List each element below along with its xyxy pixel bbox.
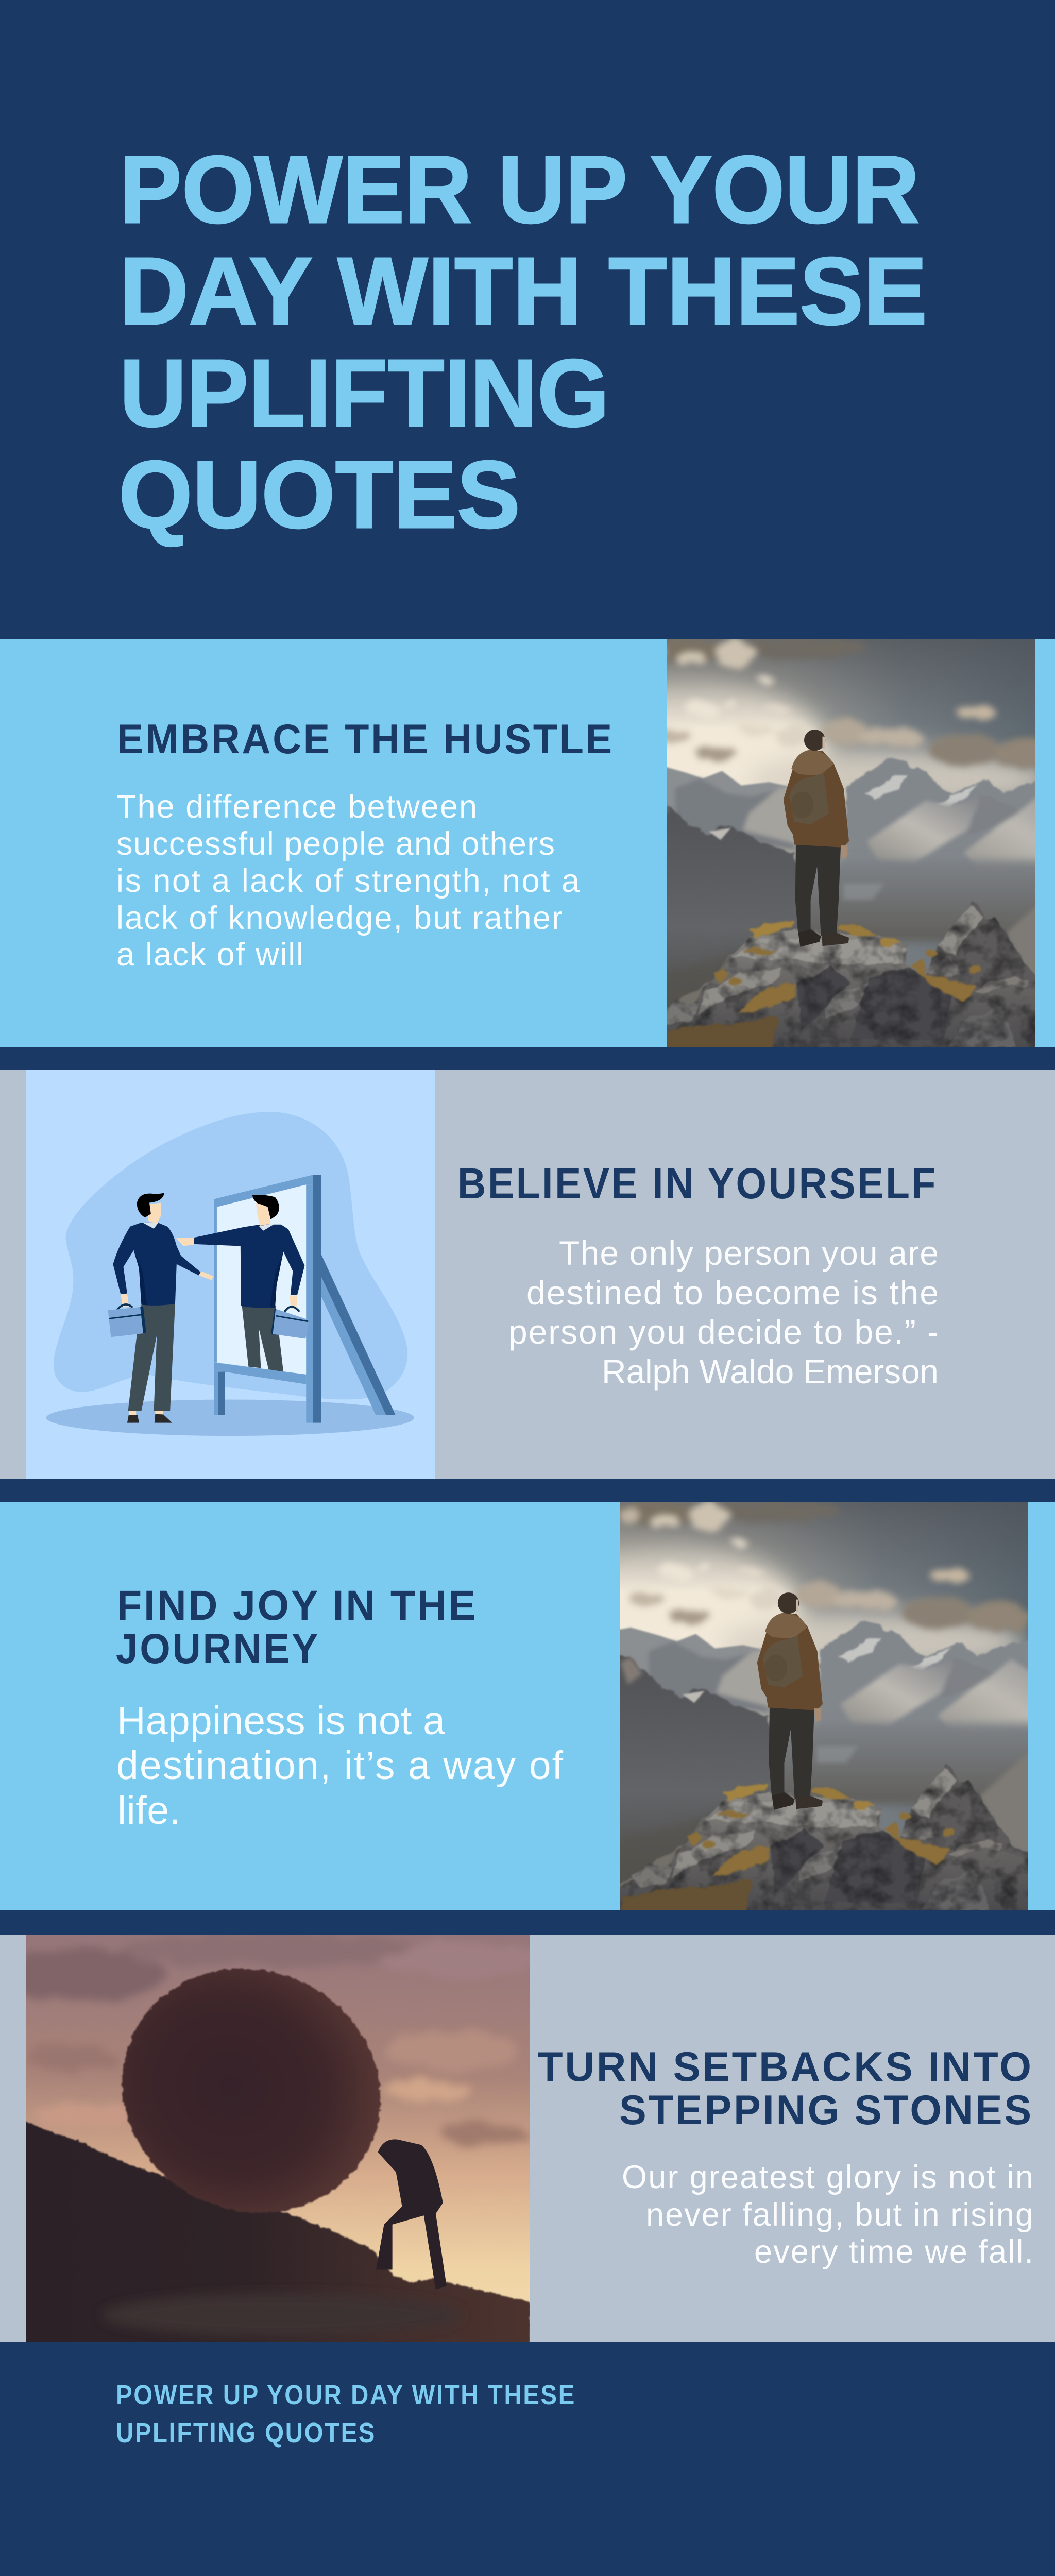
text block: embrace the hustle quote: [116, 789, 580, 973]
text block: happiness quote: Happiness is not a: [117, 1699, 445, 1743]
figure: reflection: [176, 1195, 309, 1371]
text block: emerson quote: The only person you are: [559, 1234, 939, 1272]
heading: turn setbacks into stepping stones: STEPPING STONES: [619, 2087, 1033, 2133]
image: man on mountain summit: [667, 639, 1035, 1047]
heading: believe in yourself: BELIEVE IN YOURSELF: [457, 1159, 938, 1208]
footer title: [116, 2380, 576, 2448]
footer title: POWER UP YOUR DAY WITH THESE: [116, 2380, 576, 2411]
illustration: man pointing at his reflection in a mirror: [26, 1070, 435, 1479]
text block: embrace the hustle quote: lack of knowledge, but rather: [116, 900, 563, 936]
text block: embrace the hustle quote: a lack of will: [116, 937, 303, 973]
title: [118, 137, 927, 548]
title: POWER UP YOUR: [120, 137, 920, 243]
heading: find joy in the journey: FIND JOY IN THE: [117, 1582, 478, 1629]
title: DAY WITH THESE: [120, 238, 927, 345]
text block: emerson quote: destined to become is the: [526, 1274, 939, 1312]
heading: find joy in the journey: JOURNEY: [116, 1625, 320, 1672]
text block: glory quote: every time we fall.: [754, 2234, 1033, 2270]
text block: happiness quote: destination, it’s a way of: [116, 1743, 564, 1788]
text block: glory quote: [622, 2159, 1033, 2270]
panel: embrace the hustle: [0, 621, 1055, 1067]
image: man on mountain summit, wider crop: [620, 1502, 1028, 1910]
panel: find joy in the journey: [0, 1484, 1055, 1930]
heading: embrace the hustle: EMBRACE THE HUSTLE: [117, 716, 614, 762]
heading: find joy in the journey: [116, 1582, 478, 1672]
title: UPLIFTING: [120, 340, 609, 447]
text block: emerson quote: Ralph Waldo Emerson: [602, 1352, 939, 1391]
figure: businessman: [108, 1193, 214, 1423]
image: man pushing a boulder uphill at sunset: [26, 1935, 530, 2342]
text block: embrace the hustle quote: The difference between: [116, 789, 477, 825]
heading: turn setbacks into stepping stones: TURN SETBACKS INTO: [538, 2044, 1033, 2090]
text block: glory quote: never falling, but in rising: [646, 2197, 1033, 2233]
text block: happiness quote: [116, 1699, 564, 1833]
text block: embrace the hustle quote: is not a lack of strength, not a: [116, 863, 580, 899]
text block: glory quote: Our greatest glory is not in: [622, 2159, 1033, 2195]
text block: embrace the hustle quote: successful people and others: [116, 826, 555, 862]
panel: turn setbacks into stepping stones: [0, 1926, 1055, 2355]
text block: emerson quote: [508, 1234, 939, 1391]
footer title: UPLIFTING QUOTES: [116, 2417, 376, 2448]
heading: turn setbacks into stepping stones: [538, 2044, 1033, 2133]
text block: emerson quote: person you decide to be.” -: [508, 1313, 939, 1351]
figure: man pushing: [376, 2139, 447, 2290]
title: QUOTES: [118, 442, 520, 548]
panel: believe in yourself: [0, 1070, 1055, 1479]
text block: happiness quote: life.: [117, 1788, 180, 1833]
